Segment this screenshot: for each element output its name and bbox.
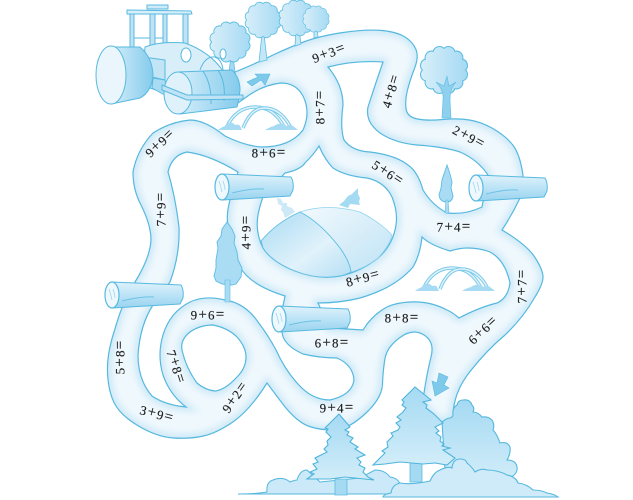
equation 8+8: 8+8= [385, 310, 419, 326]
equation 2+9: 2+9= [450, 122, 488, 152]
math equations [112, 40, 530, 426]
bridge two [415, 268, 495, 291]
log two [215, 174, 293, 200]
log three [272, 306, 350, 332]
bush left [238, 470, 400, 494]
equation 4+9: 4+9= [238, 215, 254, 249]
pale pine on hill [277, 198, 295, 218]
equation 3+9: 3+9= [138, 402, 176, 426]
cab [127, 5, 192, 47]
start arrow [247, 74, 270, 86]
equation 9+4: 9+4= [320, 400, 354, 416]
equation 8+6: 8+6= [252, 145, 286, 161]
lamps [181, 48, 191, 62]
equation 5+6: 5+6= [369, 157, 407, 189]
bush upper right [442, 400, 517, 482]
tree two [245, 2, 281, 62]
tree four [303, 6, 329, 38]
equation 6+8: 6+8= [315, 335, 349, 351]
cypress tree left [214, 222, 242, 302]
bridge one [218, 107, 298, 130]
tree by roller [210, 22, 250, 73]
cypress tree right [439, 165, 453, 213]
equation 4+8: 4+8= [378, 72, 404, 110]
tree five [421, 47, 467, 118]
maze infographic [96, 0, 560, 498]
pine tree small [307, 414, 374, 495]
equation 5+8: 5+8= [112, 340, 128, 374]
equation 7+9: 7+9= [153, 192, 169, 226]
hill [261, 188, 392, 277]
equation 9+3: 9+3= [310, 40, 348, 66]
pine on hill [339, 188, 360, 208]
equation 8+7: 8+7= [312, 90, 328, 124]
background trees [210, 0, 467, 118]
equation 8+9: 8+9= [344, 266, 382, 290]
equation 6+6: 6+6= [465, 312, 501, 348]
equation 7+4: 7+4= [437, 219, 471, 235]
log one [105, 282, 183, 308]
equation 9+9: 9+9= [142, 125, 178, 161]
body and hood [143, 42, 232, 100]
pine tree large [373, 387, 455, 482]
road roller [96, 5, 243, 114]
finish arrow [432, 373, 449, 396]
front roller [178, 70, 240, 114]
rear drum [111, 47, 153, 104]
equation 9+2: 9+2= [218, 378, 252, 416]
equation 7+8: 7+8= [163, 348, 189, 386]
road maze [107, 30, 543, 438]
equation 7+7: 7+7= [514, 269, 530, 303]
equation 9+6: 9+6= [191, 307, 225, 323]
tree three [279, 0, 315, 46]
log four [469, 175, 547, 201]
bush front [383, 459, 558, 497]
